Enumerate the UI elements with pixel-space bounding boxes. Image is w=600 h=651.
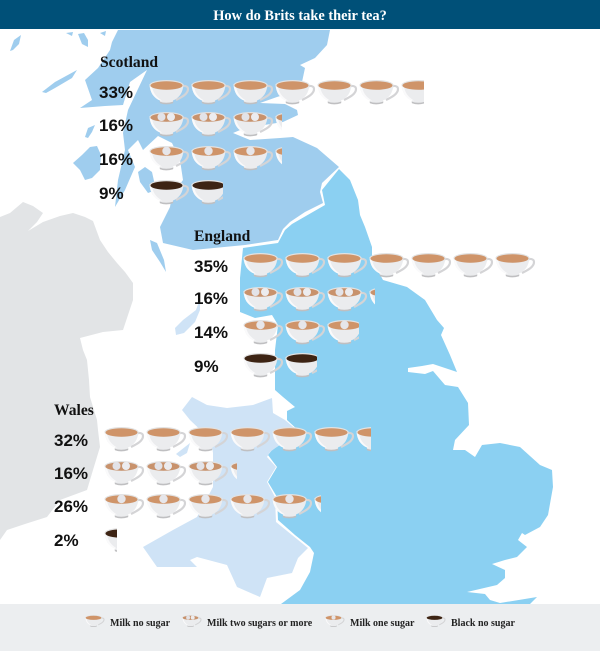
legend background xyxy=(0,604,600,651)
panel: Scotland xyxy=(99,54,440,204)
map: England xyxy=(240,169,553,604)
cups: Wales black no sugar xyxy=(104,528,143,552)
value: Wales 16%: 16% xyxy=(54,464,88,483)
panel: Wales xyxy=(54,402,395,552)
value: England 16%: 16% xyxy=(194,289,228,308)
cups: Wales one sugar xyxy=(104,494,353,518)
panel: England xyxy=(194,228,534,377)
legend item: milk two sugars or more xyxy=(182,615,313,629)
legend item: milk one sugar: Milk one sugar xyxy=(350,618,415,629)
legend item: milk two sugars or more: Milk two sugars or more xyxy=(207,618,313,629)
legend item: milk one sugar xyxy=(325,615,415,629)
value: England 35%: 35% xyxy=(194,257,228,276)
cups: Wales milk no sugar xyxy=(104,427,395,451)
map: Isle of Man xyxy=(175,299,200,335)
map: Wales xyxy=(143,397,308,597)
cups: England one sugar xyxy=(244,320,366,344)
header bar xyxy=(0,0,600,29)
value: England 14%: 14% xyxy=(194,323,228,342)
title: How do Brits take their tea? xyxy=(213,8,387,24)
value: Wales 32%: 32% xyxy=(54,431,88,450)
legend item: black no sugar xyxy=(426,615,515,629)
cups: Scotland milk no sugar xyxy=(150,80,440,104)
legend item: milk no sugar: Milk no sugar xyxy=(110,618,171,629)
cups: Wales two sugars xyxy=(104,461,269,485)
cups: England milk no sugar xyxy=(244,253,534,277)
value: England 9%: 9% xyxy=(194,357,219,376)
heading: Scotland: Scotland xyxy=(100,54,158,71)
value: Scotland 33%: 33% xyxy=(99,83,133,102)
cups: Scotland black no sugar xyxy=(150,180,230,204)
value: Scotland 9%: 9% xyxy=(99,184,124,203)
value: Scotland 16% one sugar: 16% xyxy=(99,150,133,169)
cups: England two sugars xyxy=(244,287,408,311)
value: Scotland 16% two sugars: 16% xyxy=(99,116,133,135)
cups: Scotland one sugar xyxy=(150,146,314,170)
legend item: milk no sugar xyxy=(85,615,171,629)
value: Wales 2%: 2% xyxy=(54,531,79,550)
map: Scotland xyxy=(10,30,339,272)
cups: England black no sugar xyxy=(244,353,324,377)
value: Wales 26%: 26% xyxy=(54,497,88,516)
legend item: black no sugar: Black no sugar xyxy=(451,618,515,629)
cups: Scotland two sugars xyxy=(150,112,314,136)
map: Ireland xyxy=(0,202,133,540)
heading: Wales: Wales xyxy=(54,402,94,419)
heading: England: England xyxy=(194,228,251,245)
map: Anglesey xyxy=(176,443,190,457)
legend xyxy=(0,604,600,651)
